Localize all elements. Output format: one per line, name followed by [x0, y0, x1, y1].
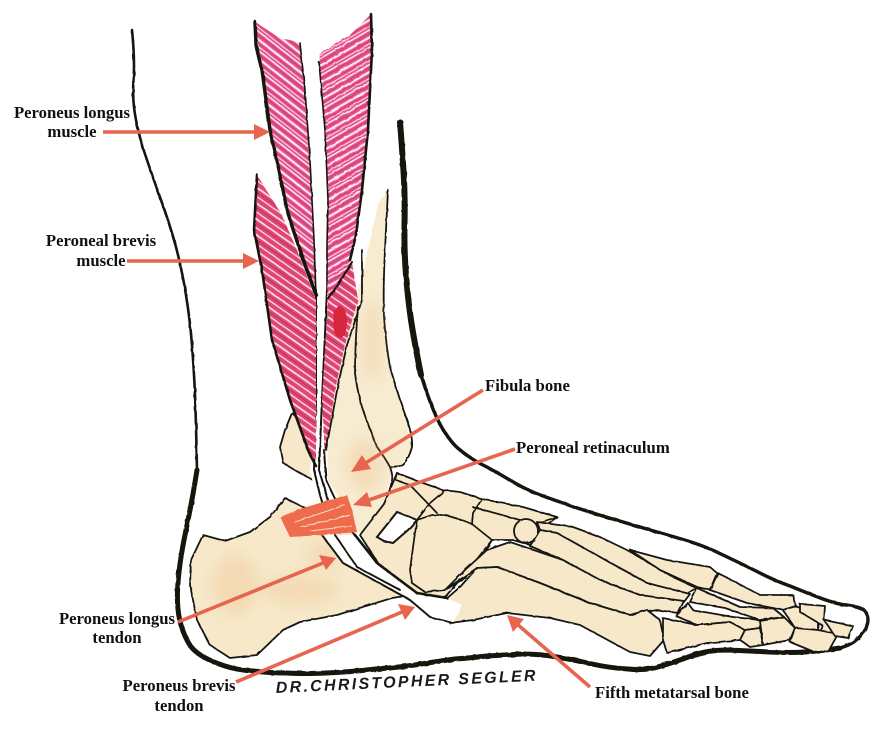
- label: peroneus longus tendon: Peroneus longus: [59, 609, 176, 628]
- arrow: fifth metatarsal bone: [507, 615, 590, 687]
- leg and foot outline: [132, 30, 868, 674]
- fourth metatarsal: [445, 542, 684, 615]
- tarsal bone outlines: [395, 473, 557, 592]
- cuneiform circle: [514, 519, 538, 543]
- medial malleolus: [280, 413, 313, 480]
- muscle: peroneal brevis right belly: [322, 250, 362, 455]
- calcaneus heel bone: [190, 498, 418, 658]
- label: fifth metatarsal bone: Fifth metatarsal bone: [595, 683, 749, 702]
- fifth metatarsal: [445, 567, 664, 656]
- midfoot bones: [360, 473, 557, 606]
- arrow: peroneal brevis muscle: [127, 253, 259, 269]
- fifth toe phalanx: [663, 618, 745, 653]
- label: fibula bone: Fibula bone: [485, 376, 570, 395]
- label: peroneus brevis tendon: tendon: [154, 696, 204, 715]
- tarsal and metatarsal foot bones: [360, 473, 853, 656]
- muscle: peroneus longus right belly: [319, 14, 372, 320]
- talus opening: [377, 512, 417, 543]
- arrow: peroneus longus tendon: [178, 555, 336, 622]
- label: peroneus longus tendon: tendon: [92, 628, 142, 647]
- muscle: peroneus longus left belly: [255, 22, 316, 295]
- label: peroneal retinaculum: Peroneal retinaculum: [516, 438, 670, 457]
- second metatarsal: [537, 522, 697, 594]
- arrow: peroneus longus muscle: [103, 124, 270, 140]
- toe bones: [740, 628, 763, 647]
- heel bone shading: [213, 300, 383, 615]
- arrow: fibula bone: [351, 390, 483, 472]
- proximal phalanges: [710, 573, 796, 610]
- label: peroneus brevis tendon: Peroneus brevis: [123, 676, 236, 695]
- label: peroneal brevis muscle: Peroneal brevis: [46, 231, 157, 250]
- signature: DR.CHRISTOPHER SEGLER: [275, 668, 536, 697]
- muscle: peroneal brevis left belly: [254, 175, 316, 466]
- label: peroneus longus muscle: Peroneus longus: [14, 103, 131, 122]
- third metatarsal: [530, 530, 690, 602]
- tibia and fibula bones: [280, 190, 412, 535]
- first metatarsal: [630, 550, 717, 590]
- label: peroneal brevis muscle: muscle: [76, 251, 126, 270]
- peroneal tendons: [310, 290, 462, 623]
- label: peroneus longus muscle: muscle: [47, 122, 97, 141]
- arrow: peroneus brevis tendon: [236, 604, 415, 682]
- peroneal retinaculum: [280, 495, 357, 537]
- arrow: peroneal retinaculum: [353, 449, 515, 507]
- fibula bone: [320, 190, 412, 535]
